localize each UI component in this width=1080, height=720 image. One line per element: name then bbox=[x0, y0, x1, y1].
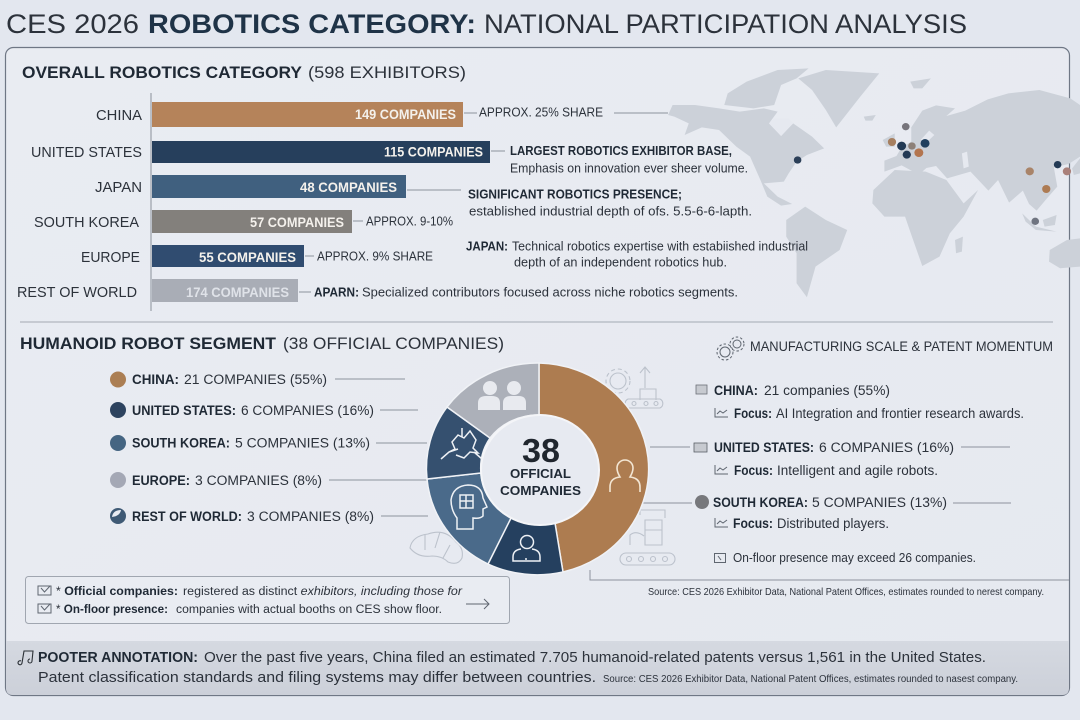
segment: South Korea bbox=[427, 473, 511, 564]
section heading: overall robotics category: (598 EXHIBITORS) bbox=[308, 63, 466, 82]
bar: China: 149 COMPANIES bbox=[355, 107, 456, 122]
right column heading: manufacturing scale bbox=[717, 337, 1053, 360]
legend item: China bbox=[110, 372, 327, 388]
right column: United States bbox=[694, 440, 1010, 478]
legend item: Europe: EUROPE: bbox=[132, 473, 190, 488]
footer annotation band: Over the past five years, China filed an estimated 7.705 humanoid-related patents versus 1,561 in the United States. bbox=[204, 650, 986, 666]
definitions box: * On-floor presence: bbox=[56, 604, 168, 616]
definitions box: companies with actual booths on CES show floor. bbox=[176, 604, 442, 616]
right column: China: CHINA: bbox=[714, 383, 758, 398]
icon: person reading bbox=[513, 536, 540, 561]
note: Europe share: APPROX. 9% SHARE bbox=[317, 250, 433, 264]
note: significant presence: established industrial depth of ofs. 5.5-6-6-lapth. bbox=[469, 204, 752, 218]
right column: United States: UNITED STATES: bbox=[714, 440, 814, 455]
segment: China bbox=[539, 363, 649, 572]
donut centre label: COMPANIES bbox=[500, 483, 581, 498]
icon: network robot bbox=[441, 428, 482, 459]
segment: Rest of World bbox=[447, 363, 539, 438]
note: United States bbox=[510, 144, 748, 176]
bar: United States bbox=[31, 141, 490, 163]
legend item: Rest of World bbox=[110, 508, 374, 524]
right column: South Korea: SOUTH KOREA: bbox=[713, 495, 808, 510]
icon: check box bbox=[38, 604, 51, 613]
bar: Europe bbox=[81, 245, 304, 267]
bar: United States: 115 COMPANIES bbox=[384, 144, 483, 160]
legend item: United States bbox=[110, 402, 374, 418]
icon: music note bbox=[18, 651, 33, 665]
decorative line: donut connectors bbox=[590, 447, 1069, 580]
segment: Europe bbox=[426, 407, 490, 479]
section heading: humanoid robot segment bbox=[20, 334, 504, 353]
definitions box: * Official companies: bbox=[56, 586, 178, 598]
right column: United States: Focus: bbox=[734, 463, 773, 478]
note: Japan expertise: JAPAN: bbox=[466, 240, 508, 254]
footer annotation band: Source: CES 2026 Exhibitor Data, National Patent Offices, estimates rounded to nasest company. bbox=[603, 674, 1018, 685]
icon: conveyor with boxes bbox=[620, 510, 675, 565]
bar: Japan bbox=[95, 175, 406, 198]
section heading: overall robotics category bbox=[22, 63, 466, 82]
note: Japan expertise: depth of an independent robotics hub. bbox=[514, 256, 727, 270]
footer annotation band bbox=[6, 641, 1069, 695]
footer annotation band: POOTER ANNOTATION: bbox=[38, 650, 198, 666]
legend item: South Korea: SOUTH KOREA: bbox=[132, 436, 230, 450]
donut centre label: OFFICIAL bbox=[510, 466, 571, 481]
bar: China: CHINA bbox=[96, 107, 142, 124]
arrow bbox=[466, 599, 489, 609]
bar: South Korea bbox=[34, 210, 352, 233]
bar: Japan: JAPAN bbox=[95, 179, 142, 196]
right column: United States: Intelligent and agile robots. bbox=[777, 463, 938, 478]
note: Japan expertise: Technical robotics expertise with estabiished industrial bbox=[512, 240, 808, 254]
bar: Japan: 48 COMPANIES bbox=[300, 180, 397, 195]
right column: on-floor presence note: On-floor presence may exceed 26 companies. bbox=[733, 551, 976, 565]
section heading: humanoid robot segment: (38 OFFICIAL COMPANIES) bbox=[283, 334, 504, 353]
icon: person bbox=[610, 460, 640, 492]
section heading: humanoid robot segment: HUMANOID ROBOT SEGMENT bbox=[20, 334, 277, 353]
right column: China: Focus: bbox=[734, 406, 772, 421]
legend item: Europe bbox=[110, 472, 322, 488]
right column heading: manufacturing scale: MANUFACTURING SCALE & PATENT MOMENTUM bbox=[750, 339, 1053, 354]
definitions box: registered as distinct exhibitors, including those for bbox=[183, 586, 463, 598]
bar: Rest of World: REST OF WORLD bbox=[17, 284, 137, 301]
title bbox=[6, 9, 967, 39]
legend item: China: CHINA: bbox=[132, 372, 179, 387]
legend item: Europe: 3 COMPANIES (8%) bbox=[195, 473, 322, 488]
bar: Rest of World: 174 COMPANIES bbox=[186, 285, 289, 300]
bar: China bbox=[96, 102, 463, 127]
right column: South Korea: Focus: bbox=[733, 516, 773, 531]
footer annotation band: Patent classification standards and filing systems may differ between countries. bbox=[38, 670, 596, 686]
bar: Rest of World bbox=[17, 279, 298, 302]
icon: two people bbox=[478, 381, 526, 410]
definitions box bbox=[26, 576, 510, 624]
bar chart: overall robotics bbox=[17, 93, 490, 311]
note: rest of world: APARN: bbox=[314, 286, 359, 300]
legend item: United States: UNITED STATES: bbox=[132, 403, 236, 418]
donut centre label bbox=[500, 432, 581, 498]
note: significant presence: SIGNIFICANT ROBOTICS PRESENCE; bbox=[468, 188, 682, 202]
legend item: United States: 6 COMPANIES (16%) bbox=[241, 403, 374, 418]
icon: factory gear and conveyor bbox=[606, 367, 663, 408]
bar: United States: UNITED STATES bbox=[31, 144, 142, 161]
bar annotations bbox=[299, 106, 808, 300]
legend item: South Korea bbox=[110, 435, 370, 451]
legend item: South Korea: 5 COMPANIES (13%) bbox=[235, 436, 370, 450]
bar: South Korea: SOUTH KOREA bbox=[34, 214, 139, 231]
title: CES 2026 bbox=[6, 9, 139, 39]
donut centre label: 38 bbox=[522, 432, 560, 469]
right column: China: 21 companies (55%) bbox=[764, 383, 890, 398]
legend item: China: 21 COMPANIES (55%) bbox=[184, 372, 327, 387]
right column: South Korea bbox=[695, 495, 1011, 531]
note: rest of world: Specialized contributors focused across niche robotics segments. bbox=[362, 286, 738, 300]
section heading: overall robotics category: OVERALL ROBOTICS CATEGORY bbox=[22, 63, 303, 82]
bar: South Korea: 57 COMPANIES bbox=[250, 215, 344, 230]
legend: humanoid segment bbox=[110, 372, 428, 524]
legend item: Rest of World: REST OF WORLD: bbox=[132, 509, 242, 524]
world map bbox=[668, 68, 1080, 297]
note: United States: LARGEST ROBOTICS EXHIBITOR BASE, bbox=[510, 144, 732, 158]
right column: China: AI Integration and frontier research awards. bbox=[776, 406, 1024, 421]
right column: South Korea: 5 COMPANIES (13%) bbox=[812, 495, 947, 510]
donut chart bbox=[426, 363, 649, 575]
note: significant presence bbox=[468, 188, 752, 218]
legend item: Rest of World: 3 COMPANIES (8%) bbox=[247, 509, 374, 524]
note: China share: APPROX. 25% SHARE bbox=[479, 106, 603, 120]
right column: United States: 6 COMPANIES (16%) bbox=[819, 440, 954, 455]
bar: Europe: EUROPE bbox=[81, 249, 140, 266]
note: Japan expertise bbox=[466, 240, 808, 270]
icon: check box bbox=[38, 586, 51, 595]
right column: China bbox=[696, 383, 1024, 421]
bar: Europe: 55 COMPANIES bbox=[199, 250, 296, 265]
segment: United States bbox=[488, 518, 563, 575]
icon: brain sketch bbox=[410, 532, 462, 563]
note: United States: Emphasis on innovation ever sheer volume. bbox=[510, 162, 748, 176]
right column: South Korea: Distributed players. bbox=[777, 516, 889, 531]
title: ROBOTICS CATEGORY: bbox=[148, 9, 476, 39]
note: South Korea share: APPROX. 9-10% bbox=[366, 214, 453, 228]
title: NATIONAL PARTICIPATION ANALYSIS bbox=[484, 9, 967, 39]
icon: head with cube bbox=[451, 485, 487, 529]
